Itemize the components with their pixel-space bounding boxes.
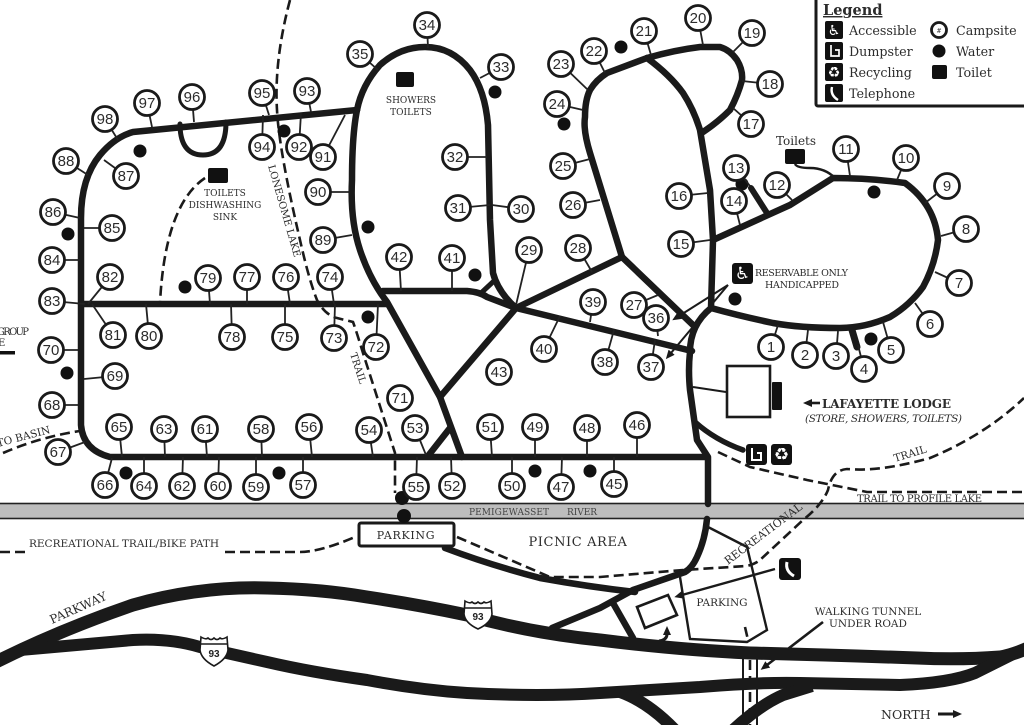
site 47 [548,457,574,500]
parkway label: PARKWAY [48,589,110,627]
site 72 [364,304,388,360]
site 18: 18 [762,76,778,93]
reservable label: RESERVABLE ONLY [755,268,849,279]
site 19: 19 [744,25,760,42]
site 31: 31 [450,200,466,217]
site 29: 29 [521,242,537,259]
site 69: 69 [107,368,123,385]
site 68: 68 [44,397,60,414]
site 3: 3 [832,348,840,365]
water at river crossing [397,509,411,523]
site 61 [192,416,218,457]
site 56 [296,414,322,457]
toilets: east loop [776,134,835,178]
site 84 [40,248,80,272]
site 5: 5 [887,342,895,359]
site 16: 16 [671,188,687,205]
site 45 [602,457,626,496]
site 52: 52 [444,478,460,495]
site 88: 88 [58,153,74,170]
site 89: 89 [315,232,331,249]
site 33 [480,54,514,80]
site 61: 61 [197,421,213,438]
legend: accessible: Accessible [848,23,917,38]
parking lot [680,527,767,642]
site 9 [925,174,960,203]
site 81 [92,304,126,348]
site 49 [522,414,548,457]
site 89 [310,228,352,252]
site 76 [274,264,298,304]
legend: recycling [825,63,912,81]
site 80 [136,304,162,348]
site 87 [104,160,138,188]
legend: toilet [932,65,992,80]
site 63: 63 [156,421,172,438]
site 85: 85 [104,220,120,237]
site 50: 50 [504,478,520,495]
site 39: 39 [585,294,601,311]
icon: accessible: ♿ [735,264,750,284]
site 27 [622,292,658,318]
site 15 [668,232,710,256]
site 12 [764,172,792,200]
site 33: 33 [493,59,509,76]
site 75 [272,304,298,350]
site 22 [582,38,606,73]
site 67 [46,440,85,464]
site 43 [486,360,512,384]
site 36 [644,306,668,336]
site 10 [894,146,918,180]
site 1: 1 [767,339,775,356]
site 34: 34 [419,17,435,34]
site 53: 53 [407,420,423,437]
trail to profile lake label: TRAIL TO PROFILE LAKE [857,494,982,505]
site 27: 27 [626,297,642,314]
site 91 [310,115,345,170]
site 76: 76 [278,269,294,286]
site 36: 36 [648,310,664,327]
north arrow: NORTH [881,707,931,722]
site 98: 98 [97,111,113,128]
site 86: 86 [45,204,61,221]
site 34 [414,12,440,48]
site 90 [306,180,350,204]
site 32 [442,144,487,170]
site 46: 46 [629,417,645,434]
site 70 [38,338,78,362]
site 69 [84,364,128,388]
site 14: 14 [726,193,742,210]
legend: accessible [825,21,917,39]
reservable label: HANDICAPPED [765,280,839,291]
icon: telephone [779,558,801,580]
site 87: 87 [118,168,134,185]
site 3 [824,331,848,368]
icon: recycling [771,444,792,465]
highways [0,588,1024,725]
group label [0,327,29,354]
site 58 [248,416,274,457]
site 2 [792,330,818,368]
walking tunnel label: WALKING TUNNEL [815,606,921,618]
site 30: 30 [513,201,529,218]
site 64 [132,457,156,498]
site 19 [733,20,764,52]
legend heading: Legend [823,2,882,19]
site 82 [88,264,122,304]
site 80: 80 [141,328,157,345]
site 30 [492,196,534,222]
site 66 [92,458,118,498]
site 29 [516,238,542,305]
lodge label: (STORE, SHOWERS, TOILETS) [805,413,962,425]
site 63 [152,416,176,457]
site 38: 38 [597,354,613,371]
parking lot: PARKING [696,597,748,609]
site 48: 48 [579,420,595,437]
legend: recycling: ♻ [828,65,840,81]
walking tunnel label: UNDER ROAD [829,618,907,630]
site 22: 22 [586,43,602,60]
site 20: 20 [690,10,706,27]
walking tunnel [743,658,757,725]
river: PEMIGEWASSET [469,508,549,518]
river: RIVER [567,508,597,518]
site 8: 8 [962,221,970,238]
interstate shield west: 93 [208,649,220,660]
site 8 [941,216,978,242]
site 51 [478,414,502,457]
site 41: 41 [444,250,460,267]
site 59: 59 [248,479,264,496]
site 96 [180,84,204,122]
lonesome lake label: LONESOME LAKE [265,164,302,258]
legend [816,0,1024,106]
legend: campsite: # [936,28,942,35]
site 59 [244,457,268,500]
legend: dumpster: Dumpster [849,44,914,59]
parking box: PARKING [377,529,435,542]
site 4 [852,345,876,382]
toilets: east loop: Toilets [776,134,816,148]
site 13 [724,156,750,186]
site 72: 72 [368,339,384,356]
site 78 [220,304,244,350]
site 73 [322,304,346,350]
icon: recycling: ♻ [774,445,789,465]
site 41 [440,246,464,291]
site 85 [84,216,124,240]
legend: campsite: Campsite [956,23,1017,38]
site 71 [388,386,412,410]
site 15: 15 [673,236,689,253]
site 7: 7 [955,275,963,292]
site 28: 28 [570,240,586,257]
interstate shield west [200,637,228,666]
site 37 [638,340,664,380]
lodge building [693,366,782,417]
interstate shield east [464,601,492,629]
site 95: 95 [254,85,270,102]
lodge label [805,397,962,425]
site 24 [544,92,583,116]
site 57 [290,457,316,498]
icon: dumpster [746,444,767,465]
river [0,504,1024,518]
site 82: 82 [102,269,118,286]
toilets: dishwashing [189,168,261,223]
site 83: 83 [44,293,60,310]
site 50 [500,457,524,498]
site 56: 56 [301,419,317,436]
site 74 [318,264,342,304]
site 16 [666,184,708,208]
site 96: 96 [184,89,200,106]
site 71: 71 [392,390,408,407]
site 21: 21 [636,23,652,40]
site 64: 64 [136,478,152,495]
trail label east: TRAIL [892,444,928,465]
site 55: 55 [408,479,424,496]
toilets: dishwashing: DISHWASHING [189,201,261,211]
legend: telephone: Telephone [849,86,915,101]
site 81: 81 [105,327,121,344]
site 40: 40 [536,341,552,358]
site 60 [206,457,230,498]
site 91: 91 [315,149,331,166]
site 14 [722,188,746,225]
site 26: 26 [565,197,581,214]
site 88 [54,148,88,175]
site 26 [560,192,600,218]
site 45: 45 [606,476,622,493]
bike path label: RECREATIONAL TRAIL/BIKE PATH [29,538,219,550]
visitor building [637,595,677,628]
site 93: 93 [299,83,315,100]
site 94: 94 [254,139,270,156]
campground roads [81,47,938,638]
site 48 [574,416,600,457]
arrows from accessible sites [671,285,728,353]
toilets: showers: SHOWERS [386,96,436,106]
site 77 [234,264,260,304]
site 70: 70 [43,342,59,359]
site 62: 62 [174,478,190,495]
site 95 [250,80,274,115]
site 47: 47 [553,479,569,496]
site 79: 79 [200,270,216,287]
site 65 [106,414,132,457]
site 4: 4 [860,361,868,378]
parking box [359,523,454,546]
site 9: 9 [943,178,951,195]
site 54 [356,418,382,457]
site 25 [550,154,590,178]
legend: campsite [932,22,1017,38]
site 57: 57 [295,477,311,494]
site 55 [404,457,428,500]
site 38 [592,330,618,374]
site 86 [40,200,80,224]
site 73: 73 [326,330,342,347]
icon: accessible [732,263,753,284]
site 92 [286,113,312,160]
site 52 [440,457,464,498]
site 39 [580,290,606,322]
site 66: 66 [97,477,113,494]
water points [60,40,880,505]
site 42 [386,244,412,291]
site 58: 58 [253,421,269,438]
site 37: 37 [643,359,659,376]
walking tunnel label [815,606,921,630]
interstate shield east: 93 [472,612,484,623]
site 54: 54 [361,422,377,439]
site 97 [134,90,160,127]
site 90: 90 [310,184,326,201]
site 35: 35 [352,46,368,63]
arrow: to building [682,569,775,595]
site 94 [250,115,274,160]
site 75: 75 [277,329,293,346]
site 67: 67 [50,444,66,461]
toilets: showers: TOILETS [390,108,432,118]
site 74: 74 [322,269,338,286]
site 84: 84 [44,252,60,269]
reservable label [755,268,849,291]
site 24: 24 [549,96,565,113]
site 11 [834,136,858,176]
site 78: 78 [224,329,240,346]
arrow: walking tunnel [767,622,823,665]
toilets: dishwashing: TOILETS [204,189,246,199]
legend: recycling: Recycling [849,65,912,80]
site 43: 43 [491,364,507,381]
site 2: 2 [801,347,809,364]
site 51: 51 [482,419,498,436]
legend: accessible: ♿ [828,23,840,39]
legend: toilet: Toilet [956,65,992,80]
site 7 [935,270,972,296]
site 32: 32 [447,149,463,166]
legend: water: Water [956,44,995,59]
site 11: 11 [838,141,854,158]
site 92: 92 [291,139,307,156]
site 6 [915,303,942,336]
site 20 [686,6,710,45]
site 65: 65 [111,419,127,436]
site 49: 49 [527,419,543,436]
picnic area label: PICNIC AREA [528,535,628,550]
site 97: 97 [139,95,155,112]
site 6: 6 [926,316,934,333]
site 28 [566,236,592,272]
arrow: up to building [659,634,667,641]
legend: dumpster [825,42,914,60]
site 98 [92,106,118,140]
legend: telephone [825,84,915,102]
recreational label: RECREATIONAL [722,500,805,567]
site 77: 77 [239,269,255,286]
trail label: TRAIL [347,352,368,386]
site 17 [733,108,764,136]
site 93 [294,78,320,112]
site 13: 13 [728,160,744,177]
site 31 [446,196,490,220]
site 10: 10 [898,150,914,167]
site 1 [758,325,784,360]
site 62 [170,457,194,498]
site 60: 60 [210,478,226,495]
site 42: 42 [391,249,407,266]
campsites [38,6,978,500]
toilets: dishwashing: SINK [213,213,237,223]
lodge label: LAFAYETTE LODGE [822,397,951,411]
toilets: showers [386,72,436,118]
site 53 [402,416,428,455]
site 5 [878,322,904,362]
site 17: 17 [743,116,759,133]
site 46 [624,412,650,457]
site 18 [742,72,782,96]
site 25: 25 [555,158,571,175]
site 40 [532,316,560,362]
site 79 [196,266,220,304]
site 23 [548,52,588,90]
north arrow [881,707,954,722]
site 35 [348,42,378,70]
site 21 [632,18,656,55]
legend: water [932,44,995,59]
site 12: 12 [769,177,785,194]
site 68 [40,392,78,418]
site 83 [40,288,85,314]
site 23: 23 [553,56,569,73]
